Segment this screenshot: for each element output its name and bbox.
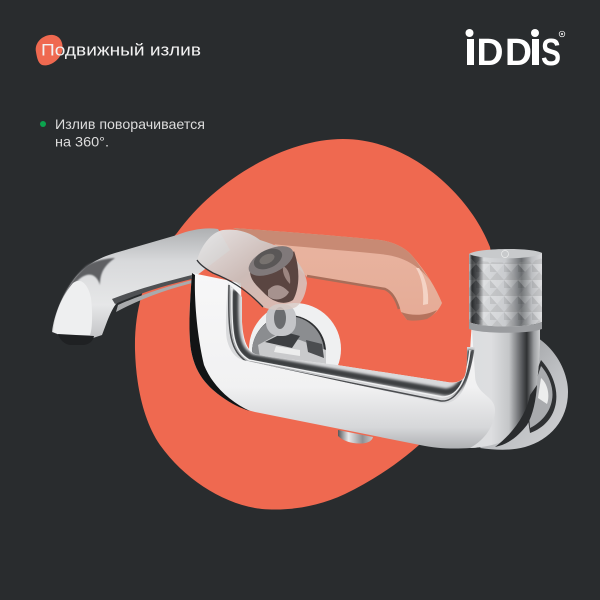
description text: Излив поворачивается bbox=[55, 116, 205, 132]
bullet marker bbox=[40, 121, 46, 127]
description text: на 360°. bbox=[55, 134, 109, 150]
left chrome spout bbox=[52, 228, 230, 345]
right wall plate bbox=[480, 338, 568, 450]
title marker blob bbox=[36, 35, 63, 65]
logo: iDDiS: S bbox=[541, 32, 561, 74]
title: Подвижный излив bbox=[41, 40, 201, 60]
swivel elbow, transparent view bbox=[197, 230, 307, 310]
pipe top face with chrome reflections bbox=[226, 283, 474, 404]
logo: iDDiS: D bbox=[476, 32, 504, 74]
description text bbox=[55, 116, 205, 150]
handle with diamond knurl bbox=[469, 249, 542, 333]
orange background blob bbox=[135, 139, 493, 510]
center wall plate and valve bbox=[249, 303, 341, 365]
infographic canvas bbox=[36, 29, 568, 510]
ghost pink spout position bbox=[233, 228, 442, 321]
logo: iDDiS: D bbox=[505, 32, 532, 74]
main faucet body bbox=[189, 273, 540, 449]
logo: iDDiS bbox=[466, 29, 565, 74]
aerator bbox=[244, 240, 298, 303]
